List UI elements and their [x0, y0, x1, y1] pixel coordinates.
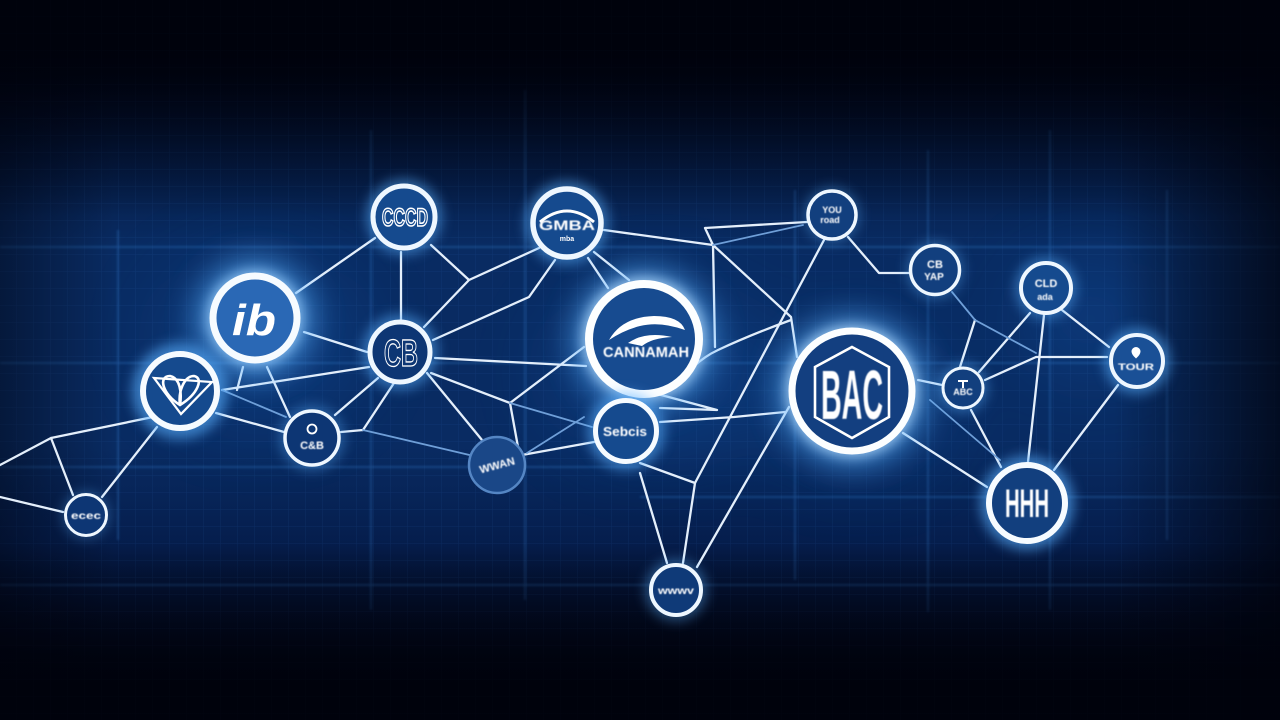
node: BAC hexagon	[776, 315, 928, 467]
node: wwv	[645, 559, 707, 621]
connection lines	[0, 222, 1118, 567]
node: ABC: ABC	[953, 387, 973, 397]
node: CLD: ada	[1037, 292, 1054, 302]
node: CANNAMAH large: CANNAMAH	[603, 344, 689, 361]
node: CLD: CLD	[1035, 278, 1057, 290]
node: ib brand	[195, 258, 315, 378]
node: ABC	[938, 363, 988, 413]
node: WWAN dim: WWAN	[478, 455, 516, 476]
node: Sebcis	[587, 392, 665, 470]
node: CCCD: CCCD	[382, 204, 428, 232]
node: YOU	[804, 187, 860, 243]
node: HH: HHH	[1005, 482, 1049, 526]
node: CB	[362, 314, 438, 390]
node: CLD	[1015, 257, 1077, 319]
node: YOU: road	[820, 215, 840, 225]
dim connection lines	[222, 225, 1036, 460]
node: GMBA: mba	[560, 236, 574, 243]
node: CCCD	[366, 179, 442, 255]
node: CB small: YAP	[924, 272, 944, 283]
node: heart logo	[132, 343, 228, 439]
node: CB small: CB	[927, 259, 943, 271]
node: C&B	[279, 405, 345, 471]
node: BAC hexagon: BAC	[821, 356, 883, 434]
node: YOU: YOU	[822, 205, 842, 215]
node: GMBA	[525, 181, 609, 265]
node: TOUR with pin	[1104, 328, 1170, 394]
node: HH	[980, 456, 1074, 550]
node: CB small	[906, 241, 964, 299]
node: C&B: C&B	[300, 440, 324, 452]
node: ece	[62, 491, 110, 539]
node: CANNAMAH large	[572, 267, 716, 411]
node: GMBA: GMBA	[539, 217, 595, 233]
node: Sebcis: Sebcis	[603, 424, 647, 439]
node: ib brand: ib	[232, 296, 276, 345]
node: WWAN dim	[469, 437, 525, 493]
node: ece: ecec	[71, 511, 102, 522]
node: wwv: wwwv	[657, 586, 695, 597]
node: TOUR with pin: TOUR	[1118, 362, 1155, 372]
node: CB: CB	[384, 333, 418, 375]
